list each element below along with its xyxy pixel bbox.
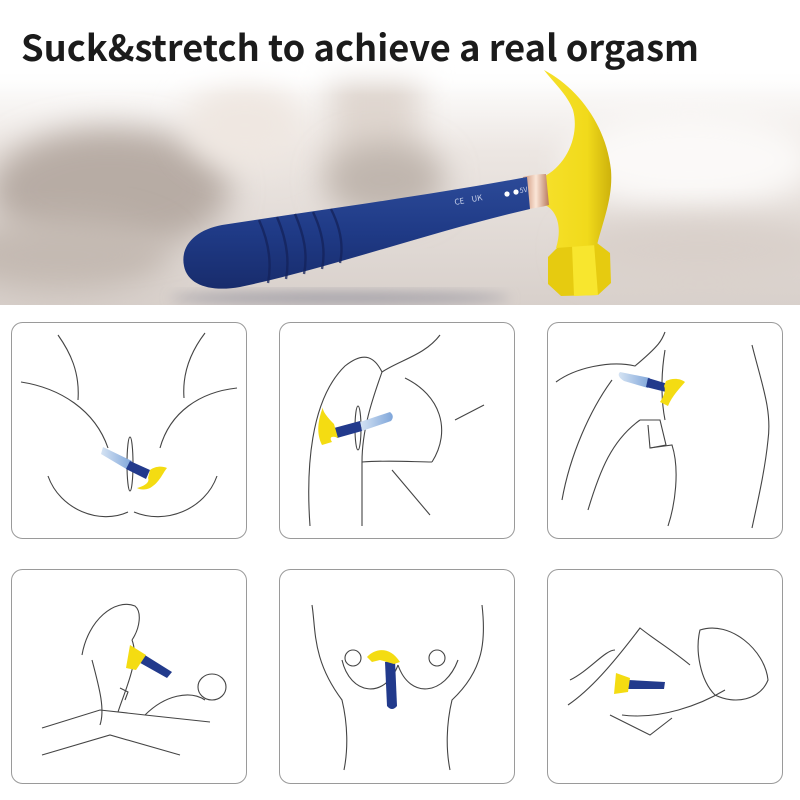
product icon xyxy=(619,372,685,406)
device markings: UK xyxy=(471,192,484,205)
panel 1 xyxy=(12,322,246,538)
body ribs xyxy=(259,209,342,283)
hammer head xyxy=(543,70,611,248)
panel 2 xyxy=(280,322,514,538)
panel 5 xyxy=(280,570,514,784)
panel 4 xyxy=(12,570,246,784)
product icon xyxy=(367,650,400,709)
product: hammer-shaped device xyxy=(183,70,611,296)
blue body xyxy=(183,177,530,289)
product icon xyxy=(126,645,172,678)
panel 6 xyxy=(548,570,782,784)
device markings: 5V xyxy=(519,185,529,196)
device markings: CE xyxy=(454,195,465,208)
title: Suck&stretch to achieve a real orgasm xyxy=(21,20,699,72)
hammer base xyxy=(548,243,611,296)
panel 3 xyxy=(548,322,782,538)
rose gold ring xyxy=(523,174,549,209)
product icon xyxy=(318,407,393,445)
product icon xyxy=(614,673,665,694)
device markings xyxy=(454,185,529,208)
hero background photo xyxy=(0,70,800,305)
product icon xyxy=(101,447,167,490)
